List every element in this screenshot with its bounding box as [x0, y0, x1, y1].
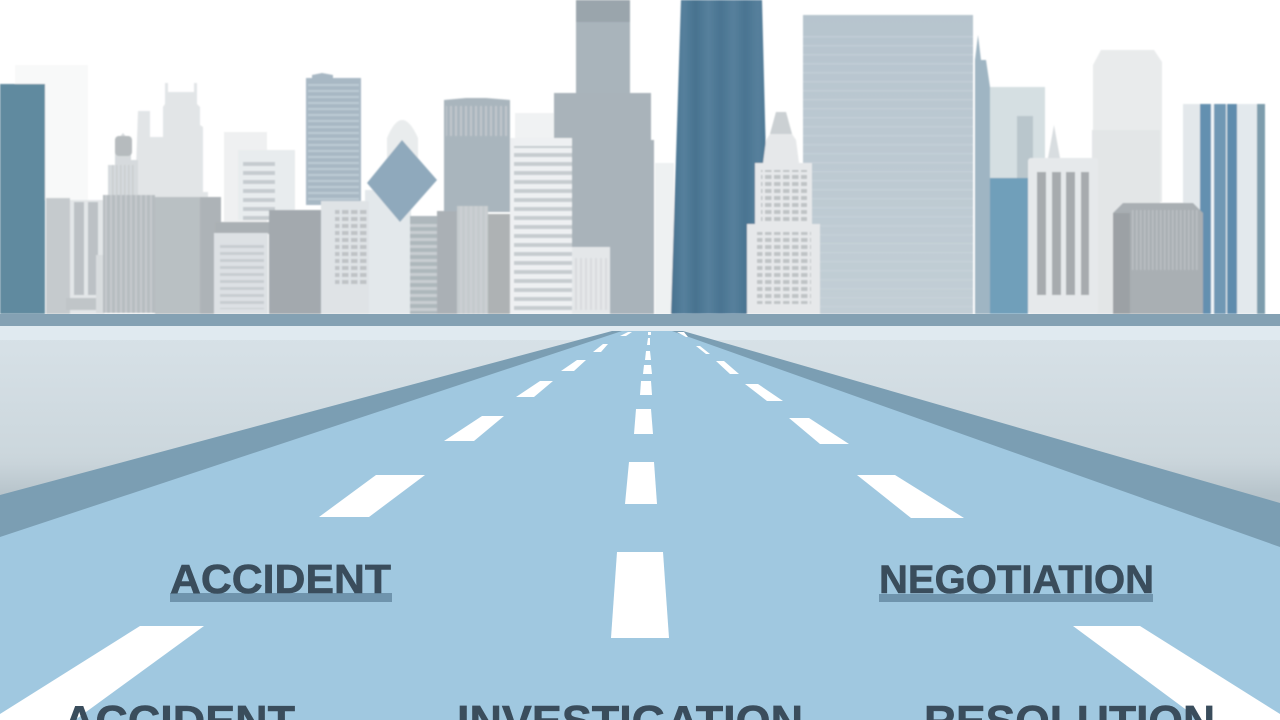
- building: striped column block: [66, 200, 114, 314]
- building: pale slab: [655, 163, 674, 314]
- building: ornate white tower: [747, 112, 820, 314]
- building: windowed low block: [214, 233, 268, 314]
- building: steel tower: [444, 98, 510, 212]
- building: narrow striped block: [410, 216, 437, 314]
- building: striped blue and white tower: [1183, 104, 1265, 314]
- building: crowned tower: [135, 83, 208, 197]
- building: windowed white block: [321, 201, 369, 314]
- building: large pale glass tower: [803, 15, 973, 314]
- label: accident upper: ACCIDENT: [170, 556, 391, 602]
- right lane dashes: [677, 332, 1280, 720]
- building: pale low block: [46, 198, 70, 314]
- building: pale back block: [224, 132, 267, 222]
- building: blue-grey striped tower: [306, 73, 361, 205]
- building: grey mid block: [103, 195, 221, 314]
- building: grey pair: [437, 206, 516, 314]
- building: small striped block: [572, 247, 610, 314]
- building: dark teal tower far left: [0, 84, 45, 314]
- building: white striped block: [238, 150, 295, 220]
- building: spired blue tower: [975, 35, 990, 314]
- left lane dashes: [0, 332, 632, 720]
- building: dark blue central tower: [671, 0, 770, 314]
- city skyline: [0, 0, 1265, 314]
- building: white block with grey columns: [1028, 125, 1098, 314]
- label: negotiation: NEGOTIATION: [879, 558, 1154, 602]
- building: white horizontal striped block: [510, 138, 572, 314]
- building: blue block: [990, 178, 1028, 314]
- building: ghost dome: [387, 120, 418, 160]
- building: ghost block: [515, 113, 555, 139]
- centre lane dashes: [611, 332, 669, 638]
- ground plane: [0, 326, 1280, 556]
- building: faint background tower left: [15, 65, 88, 200]
- building: dark low connector: [215, 222, 270, 234]
- building: grey chamfered block: [1113, 203, 1203, 314]
- building: white tower under diamond: [365, 190, 411, 314]
- building: slate block: [269, 210, 321, 314]
- icon: diamond top of tower: [367, 140, 437, 222]
- building: tall stepped tower: [554, 0, 654, 314]
- building: ornate tower: [108, 133, 138, 200]
- road surface: [0, 331, 1280, 720]
- road lane markings: [0, 332, 1280, 720]
- horizon band: [0, 314, 1280, 326]
- building: grey block behind ornate tower: [821, 225, 851, 314]
- building: pale block with inset: [990, 87, 1045, 180]
- road shoulder: [0, 331, 1280, 720]
- building: faded tall tower: [1092, 50, 1162, 314]
